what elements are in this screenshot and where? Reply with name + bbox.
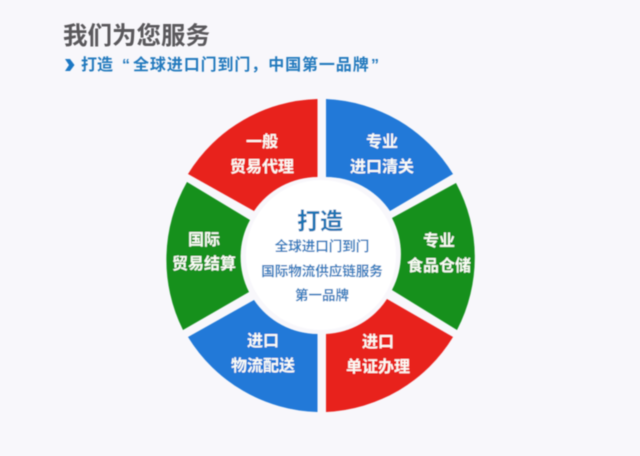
panel: import documents: 单证办理 bbox=[346, 358, 410, 376]
subtitle text: 打造 bbox=[81, 55, 113, 74]
subtitle text: 全球进口门到门，中国第一品牌 bbox=[133, 55, 370, 74]
panel: import logistics: 物流配送 bbox=[231, 356, 295, 375]
panel: import customs clearance: 进口清关 bbox=[350, 157, 414, 176]
panel: general trade agency: 一般 bbox=[246, 133, 278, 151]
panel: import customs clearance bbox=[326, 99, 453, 211]
panel: import documents bbox=[326, 299, 453, 412]
icon: chevron bbox=[65, 59, 74, 71]
panel: international trade settlement bbox=[166, 182, 250, 330]
subtitle text: ” bbox=[371, 57, 379, 74]
center text: 全球进口门到门 bbox=[275, 238, 369, 254]
panel: general trade agency bbox=[188, 99, 318, 211]
panel: general trade agency: 贸易代理 bbox=[230, 158, 294, 176]
center text: 第一品牌 bbox=[295, 287, 349, 303]
content bbox=[63, 22, 475, 412]
subtitle text: “ bbox=[122, 57, 130, 74]
panel: international trade settlement: 国际 bbox=[188, 231, 220, 249]
panel: food warehousing bbox=[392, 183, 475, 330]
subtitle bbox=[65, 55, 379, 74]
center circle bbox=[246, 180, 396, 330]
center text bbox=[261, 238, 383, 303]
panel: import documents: 进口 bbox=[362, 333, 394, 351]
panel: food warehousing: 食品仓储 bbox=[407, 256, 471, 275]
center heading: 打造 bbox=[297, 208, 343, 234]
panel: import logistics: 进口 bbox=[247, 332, 279, 350]
center text: 国际物流供应链服务 bbox=[261, 263, 383, 279]
panel: food warehousing: 专业 bbox=[423, 232, 455, 250]
panel: international trade settlement: 贸易结算 bbox=[172, 254, 236, 273]
title: 我们为您服务 bbox=[63, 22, 210, 50]
panel: import logistics bbox=[188, 300, 318, 412]
panel: import customs clearance: 专业 bbox=[366, 133, 398, 151]
